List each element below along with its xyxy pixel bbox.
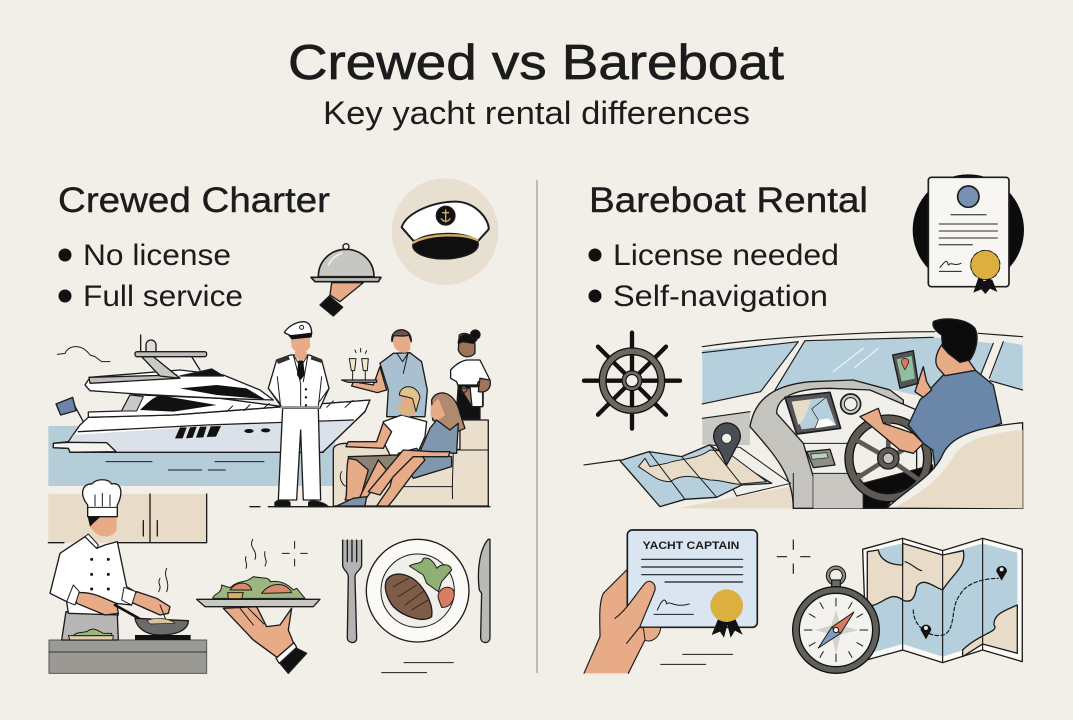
illustration: hand holding captain licence: YACHT CAPTAIN: [643, 540, 739, 552]
heading: crewed charter: Crewed Charter: [58, 181, 330, 220]
illustration: folded route map: [863, 538, 1022, 663]
subtitle: Key yacht rental differences: [323, 95, 750, 131]
icon: captain hat: [392, 178, 498, 285]
icon: certificate on black circle: [913, 174, 1024, 294]
illustration: folded chart with location pin: [620, 423, 791, 507]
illustration: yacht on water: [48, 335, 370, 486]
icon: cloche on hand: [311, 244, 381, 316]
panel: bareboat rental: [584, 174, 1024, 673]
illustration: chef cooking: [48, 480, 207, 673]
illustration: helm wheel icon: [584, 333, 680, 429]
bullet: self-navigation: Self-navigation: [613, 280, 828, 313]
illustration: guests on sofa with waiters: [250, 330, 490, 507]
illustration: yacht cockpit with skipper: [584, 319, 1023, 508]
illustration: steak plate with cutlery: [343, 539, 490, 673]
title: Crewed vs Bareboat: [288, 36, 784, 90]
illustration: hand holding captain licence: [584, 530, 757, 673]
heading: bareboat rental: Bareboat Rental: [589, 181, 868, 220]
icon: sparkle: [777, 540, 810, 573]
illustration: compass: [796, 568, 876, 670]
bullet: no license: No license: [83, 239, 231, 272]
panel: crewed charter: [48, 178, 498, 673]
bullet: full service: Full service: [83, 280, 243, 313]
illustration: captain: [268, 322, 329, 507]
illustration: plated dish on hand: [197, 539, 320, 673]
bullet: license needed: License needed: [613, 239, 839, 272]
